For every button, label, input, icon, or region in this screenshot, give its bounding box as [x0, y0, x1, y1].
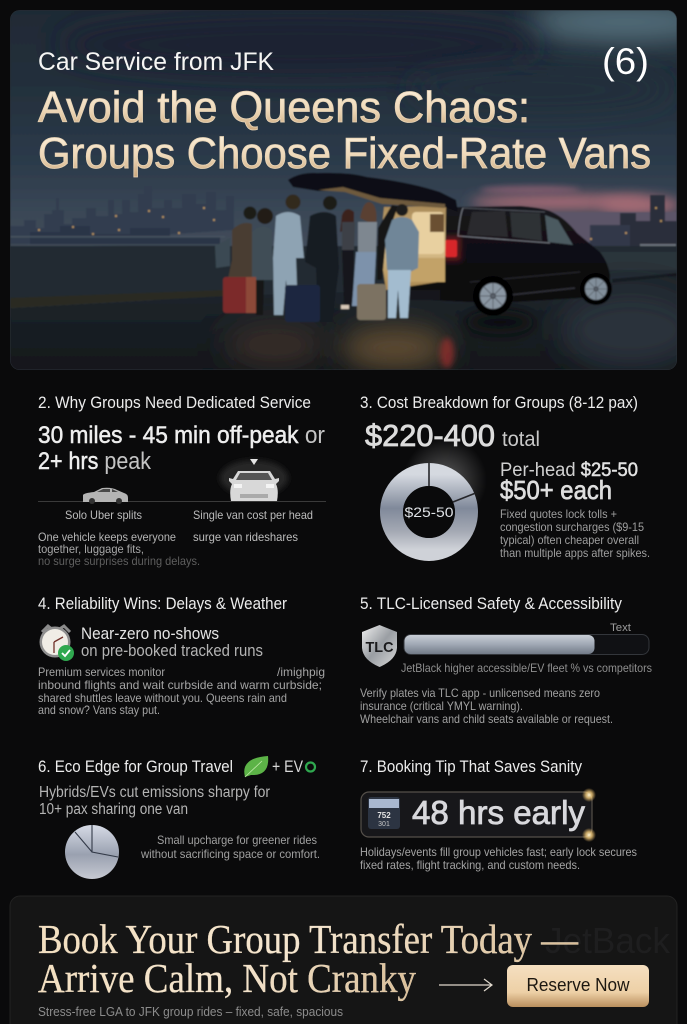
- button: reserve now: [507, 965, 649, 1007]
- callout: 48 hrs early: [361, 788, 596, 842]
- section 7 body text: [360, 845, 637, 872]
- traveller: dark suit: [306, 196, 338, 294]
- section 7 body text: fixed rates, flight tracking, and custom needs.: [360, 858, 580, 872]
- donut chart: $25-50: [404, 504, 454, 520]
- eco stat: 10+ pax sharing one van: [39, 801, 188, 818]
- per-head stat: [500, 460, 638, 505]
- per-head stat: Per-head $25-50: [500, 460, 638, 481]
- luggage: [223, 277, 386, 322]
- section 3 body text: typical) often cheaper overall: [500, 533, 639, 547]
- button: reserve now: Reserve Now: [526, 975, 630, 995]
- comparison labels: [65, 508, 313, 544]
- section 3 body text: than multiple apps after spikes.: [500, 546, 650, 560]
- cta headline: [38, 916, 579, 1001]
- hero number badge: (6): [602, 41, 649, 82]
- section 2 body text: [38, 530, 200, 568]
- arrow: [439, 979, 492, 991]
- section 2 body text: together, luggage fits,: [38, 542, 144, 556]
- travel time stat: 2+ hrs peak: [38, 448, 152, 475]
- section 6 body text: Small upcharge for greener rides: [157, 833, 317, 847]
- heading 7: 7. Booking Tip That Saves Sanity: [360, 758, 583, 776]
- plus EV label: + EV: [272, 758, 303, 776]
- progress bar: [404, 634, 649, 654]
- callout: 48 hrs early: 48 hrs early: [412, 794, 585, 831]
- panel: cost breakdown: [360, 394, 650, 560]
- per-head stat: $50+ each: [500, 475, 612, 505]
- panel: hero: [10, 2, 687, 370]
- hero title: Avoid the Queens Chaos:: [38, 83, 530, 132]
- eco stat: [39, 784, 270, 818]
- reflections: [225, 321, 325, 369]
- heading 5: 5. TLC-Licensed Safety & Accessibility: [360, 595, 623, 613]
- donut chart: [392, 438, 487, 550]
- open hatch: [288, 173, 458, 212]
- section 6 body text: [140, 833, 320, 861]
- section 4 body text: /imighpig: [277, 665, 325, 679]
- section 4 body text: [38, 665, 325, 717]
- panel: call to action: [10, 896, 677, 1024]
- icon: calendar: 301: [378, 821, 390, 828]
- watermark: JetBack: [545, 920, 671, 961]
- icon: small sedan: [83, 488, 128, 504]
- hero eyebrow: Car Service from JFK: [38, 48, 274, 76]
- pie chart: [65, 825, 119, 879]
- section 4 body text: inbound flights and wait curbside and warm curbside;: [38, 678, 322, 692]
- panel: reliability: [38, 595, 325, 717]
- no-shows stat: on pre-booked tracked runs: [81, 641, 263, 660]
- icon: TLC shield: [362, 625, 397, 667]
- icon: van front with glow: [220, 459, 288, 501]
- icon: EV circle: [306, 762, 315, 772]
- travel time stat: 30 miles - 45 min off-peak or: [38, 422, 325, 449]
- section 5 body text: Verify plates via TLC app - unlicensed means zero: [360, 686, 600, 700]
- total cost stat: $220-400: [365, 418, 495, 453]
- traveller: woman dark top: [340, 209, 355, 309]
- cta subtext: Stress-free LGA to JFK group rides – fixed, safe, spacious: [38, 1005, 343, 1019]
- van body: [405, 206, 612, 316]
- heading 6: 6. Eco Edge for Group Travel: [38, 758, 233, 776]
- icon: TLC shield: TLC: [366, 639, 394, 656]
- panel: eco edge: [38, 756, 320, 879]
- comparison labels: surge van rideshares: [193, 530, 298, 544]
- icon: calendar: [368, 797, 400, 829]
- hero photo: van and group at dusk: [10, 2, 687, 370]
- panel: booking tip: [360, 758, 637, 872]
- section 5 body text: insurance (critical YMYL warning).: [360, 699, 523, 713]
- heading 3: 3. Cost Breakdown for Groups (8-12 pax): [360, 394, 638, 412]
- traveller: hoodie: [385, 204, 419, 318]
- cta headline: Book Your Group Transfer Today —: [38, 916, 579, 962]
- comparison labels: Solo Uber splits: [65, 508, 142, 522]
- heading 2: 2. Why Groups Need Dedicated Service: [38, 394, 311, 412]
- section 4 body text: shared shuttles leave without you. Queens rain and: [38, 691, 287, 705]
- section 6 body text: without sacrificing space or comfort.: [140, 847, 320, 861]
- divider baseline: [38, 501, 326, 502]
- progress bar caption: JetBlack higher accessible/EV fleet % vs competitors: [401, 661, 652, 675]
- section 3 body text: congestion surcharges ($9-15: [500, 520, 644, 534]
- heading 4: 4. Reliability Wins: Delays & Weather: [38, 595, 287, 613]
- section 3 body text: Fixed quotes lock tolls +: [500, 507, 617, 521]
- section 5 body text: [360, 686, 613, 726]
- section 2 body text: One vehicle keeps everyone: [38, 530, 176, 544]
- section 4 body text: and snow? Vans stay put.: [38, 703, 160, 717]
- panel: why groups need dedicated service: [38, 394, 326, 568]
- group of travellers: [215, 194, 419, 322]
- icon: clock with green check: [40, 626, 74, 661]
- section 2 body text: no surge surprises during delays.: [38, 554, 200, 568]
- traveller: brown jacket: [214, 206, 257, 278]
- section 4 body text: Premium services monitor: [38, 665, 165, 679]
- traveller: light blue: [273, 194, 304, 315]
- ground: [10, 276, 677, 370]
- traveller: woman grey: [352, 202, 377, 306]
- section 3 body text: [500, 507, 650, 560]
- icon: calendar: 752: [377, 811, 391, 820]
- section 5 body text: Wheelchair vans and child seats available or request.: [360, 712, 613, 726]
- hero title: Groups Choose Fixed-Rate Vans: [38, 129, 651, 178]
- cta headline: Arrive Calm, Not Cranky: [38, 955, 416, 1001]
- eco stat: Hybrids/EVs cut emissions sharpy for: [39, 784, 270, 801]
- total cost stat: total: [502, 428, 540, 451]
- section 7 body text: Holidays/events fill group vehicles fast; early lock secures: [360, 845, 637, 859]
- wall and railing: [10, 246, 677, 300]
- dusk clouds: [470, 194, 650, 210]
- no-shows stat: [81, 624, 263, 660]
- skyline: [10, 207, 234, 244]
- travel time stat: [38, 422, 325, 475]
- no-shows stat: Near-zero no-shows: [81, 624, 219, 643]
- comparison labels: Single van cost per head: [193, 508, 313, 522]
- traveller: long hair: [252, 208, 273, 315]
- progress bar label: Text: [610, 622, 631, 634]
- city lights: [38, 207, 662, 240]
- icon: leaf: [244, 756, 268, 777]
- panel: TLC safety: [360, 595, 652, 726]
- hero title: [38, 83, 651, 178]
- van interior: [380, 206, 446, 290]
